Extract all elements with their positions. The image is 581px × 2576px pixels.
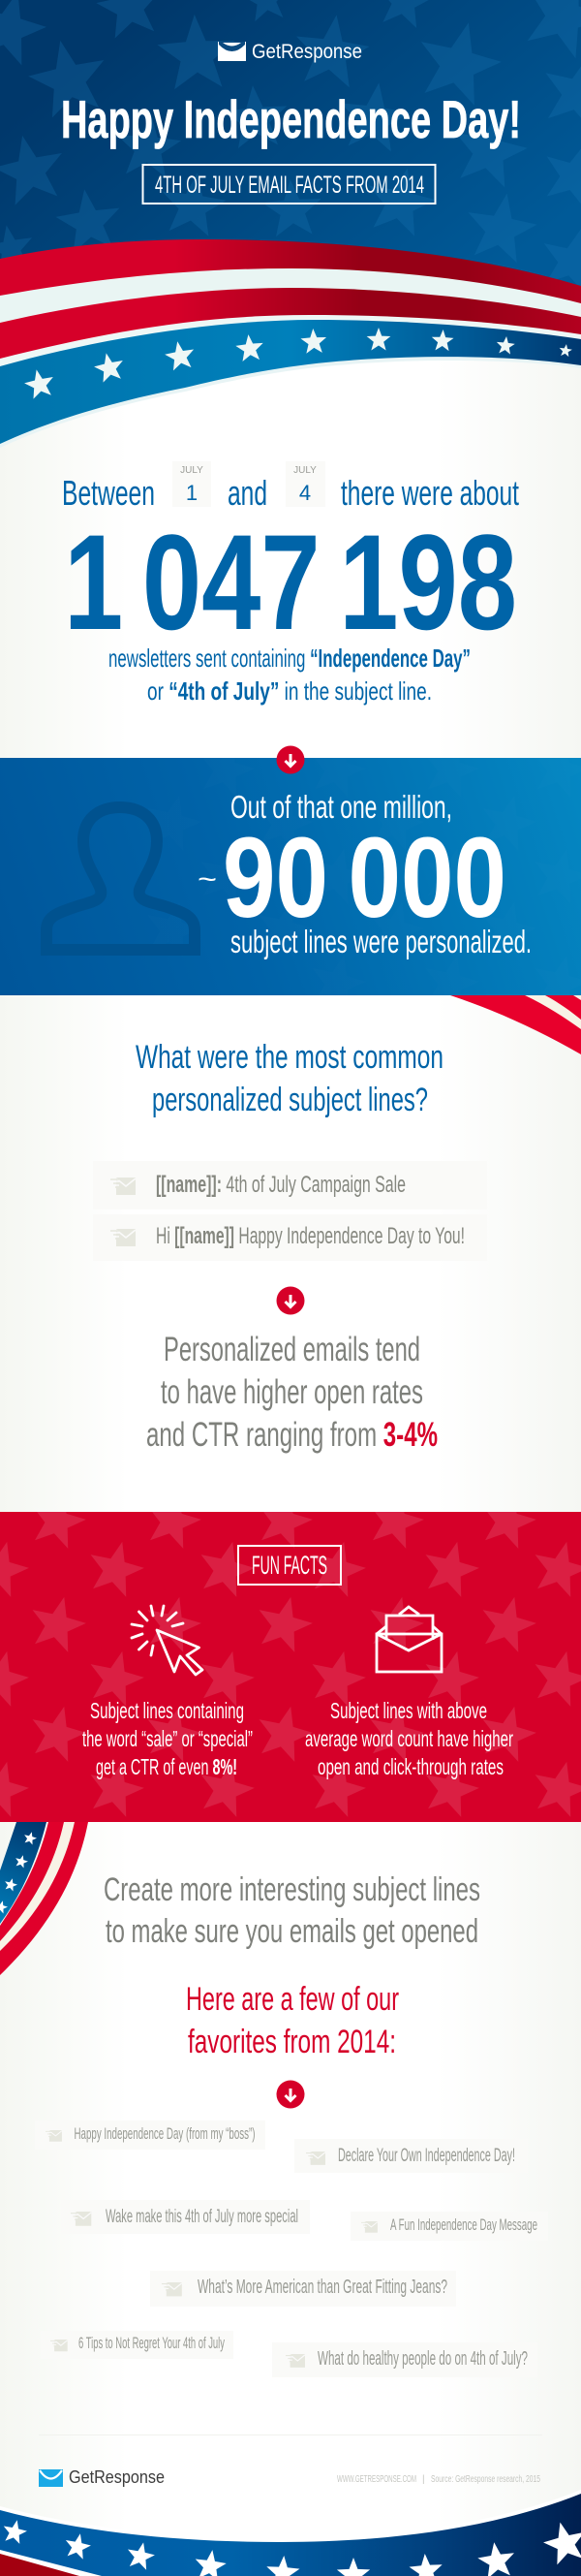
fact: word count: Subject lines with above: [330, 1698, 487, 1723]
header panel: [0, 0, 581, 349]
header logo: [218, 41, 362, 63]
tag: boss: [35, 2120, 265, 2150]
date: July 4: JULY: [293, 465, 317, 476]
heading: favorites: Here are a few of our: [186, 1981, 399, 2018]
icon: envelope: [110, 1229, 136, 1246]
date: July 1: 1: [186, 481, 198, 505]
footer source: |: [422, 2474, 425, 2485]
flag ribbon: header: [0, 239, 581, 457]
fact: word count: [305, 1698, 513, 1779]
arrow badge 2: [277, 1287, 304, 1314]
subject line row 2: [93, 1214, 487, 1261]
subtitle box: [143, 165, 436, 204]
tag: wake: [61, 2200, 310, 2234]
text: personalized emails open rates: [146, 1331, 438, 1454]
newsletters description: [108, 644, 471, 706]
ribbon stars: [0, 1831, 38, 1914]
heading: common subject lines: personalized subject lines?: [152, 1082, 428, 1118]
date: July 1: JULY: [180, 465, 203, 476]
number: 90 000: 90 000: [223, 814, 506, 942]
blue section stars: [139, 736, 581, 1013]
date: July 1: [172, 461, 211, 507]
text: personalized emails open rates: to have higher open rates: [161, 1373, 423, 1411]
tag: healthy: [272, 2342, 537, 2377]
fun facts heading box: [238, 1546, 341, 1585]
intro sentence with dates: and: [228, 473, 267, 513]
arrow badge 1: [277, 746, 304, 773]
footer source: [337, 2474, 540, 2485]
heading: create more interesting: [104, 1871, 480, 1950]
fact: sale or special: [82, 1698, 253, 1779]
fact: sale or special: get a CTR of even 8%!: [96, 1754, 237, 1779]
footer logo: GetResponse: [69, 2467, 165, 2487]
panel: fun facts: [0, 1487, 581, 1822]
subject line row 2: Hi [[name]] Happy Independence Day to You!: [156, 1223, 465, 1249]
tag: wake: Wake make this 4th of July more special: [106, 2207, 298, 2227]
header logo: GetResponse: [252, 41, 362, 63]
tag: declare: [294, 2139, 528, 2173]
icon: person outline: [46, 807, 195, 950]
subject line row 1: [[name]]: 4th of July Campaign Sale: [156, 1172, 406, 1198]
text: out of that one million: Out of that one million,: [230, 789, 452, 825]
tag: tips: 6 Tips to Not Regret Your 4th of July: [78, 2334, 225, 2352]
footer source: WWW.GETRESPONSE.COM: [337, 2474, 416, 2485]
date: July 4: 4: [299, 481, 311, 505]
tilde: ~: [198, 864, 217, 895]
fun facts heading box: FUN FACTS: [252, 1551, 327, 1580]
text: personalized emails open rates: and CTR ranging from 3-4%: [146, 1416, 438, 1454]
ribbon stars: [1, 2517, 581, 2576]
heading: common subject lines: What were the most common: [136, 1039, 443, 1076]
date: July 4: [286, 461, 325, 507]
newsletters description: or “4th of July” in the subject line.: [147, 676, 432, 706]
newsletters description: newsletters sent containing “Independence Day”: [108, 644, 471, 673]
tag: tips: [41, 2331, 233, 2359]
tag: fun message: [351, 2212, 548, 2241]
subject line row 1: [93, 1161, 487, 1209]
heading: favorites: [186, 1981, 399, 2060]
heading: common subject lines: [136, 1039, 443, 1118]
icon: open envelope: [377, 1607, 442, 1672]
fact: sale or special: Subject lines containing: [90, 1698, 244, 1723]
intro sentence with dates: Between: [62, 473, 155, 513]
icon: envelope: [110, 1178, 136, 1195]
header star pattern: [0, 0, 581, 297]
flag ribbon: bottom: [0, 2490, 581, 2576]
flag ribbon: top left: [0, 1822, 88, 1975]
flag ribbon: top right: [450, 995, 581, 1054]
fact: sale or special: the word “sale” or “special”: [82, 1726, 253, 1751]
panel: personalized: [0, 736, 581, 1013]
tag: jeans: [150, 2271, 456, 2307]
arrow badge 3: [277, 2080, 304, 2109]
tag: boss: Happy Independence Day (from my “boss”): [74, 2124, 256, 2143]
ribbon stars: [22, 328, 573, 400]
heading: favorites: favorites from 2014:: [188, 2024, 396, 2060]
text: personalized emails open rates: Personalized emails tend: [164, 1331, 420, 1368]
red section stars: [0, 1487, 581, 1819]
icon: cursor click: [132, 1606, 202, 1675]
intro sentence with dates: [62, 461, 519, 513]
